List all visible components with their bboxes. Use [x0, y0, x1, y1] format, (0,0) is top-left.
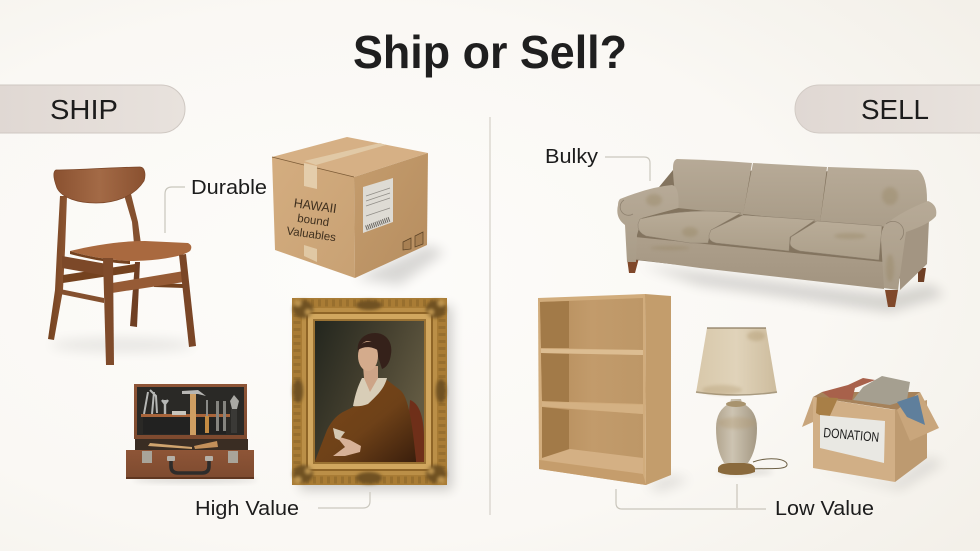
box side — [895, 400, 927, 482]
leader line: Bulky — [605, 157, 650, 181]
right flap — [897, 392, 939, 441]
right arm front — [881, 201, 936, 290]
header pill: SHIP: SHIP — [50, 94, 118, 125]
seat cushions — [638, 211, 741, 243]
front legs — [103, 258, 114, 365]
canvas — [315, 321, 424, 462]
neck — [363, 366, 378, 392]
label: High Value: High Value — [195, 498, 299, 520]
shade — [696, 328, 777, 396]
back cushions — [673, 159, 752, 215]
icon: toolbox — [126, 384, 257, 483]
icon: sofa — [617, 159, 945, 312]
compartments — [540, 298, 643, 350]
title: Ship or Sell? — [353, 26, 627, 78]
chemise — [353, 378, 387, 406]
icon: framed portrait — [292, 298, 452, 490]
box front — [813, 397, 895, 482]
seat — [70, 241, 191, 261]
face — [358, 341, 378, 371]
clothes — [822, 378, 875, 400]
right arm side — [900, 220, 929, 290]
body underlay — [636, 170, 927, 288]
frame ornaments — [293, 300, 446, 484]
latches — [142, 451, 152, 463]
tray — [135, 439, 248, 451]
base — [633, 237, 884, 289]
base — [126, 450, 254, 479]
brass foot — [718, 463, 755, 475]
rear legs and posts — [48, 196, 67, 340]
leader line: High Value — [318, 492, 370, 508]
leader line: Durable — [165, 187, 185, 233]
icon: donation box — [802, 376, 945, 490]
cord — [752, 459, 787, 469]
blue garment — [897, 395, 925, 425]
tape — [304, 143, 386, 165]
shelves — [541, 349, 643, 355]
lid — [134, 384, 247, 439]
box lettering: HAWAII — [293, 195, 338, 216]
header pill: SHIP — [0, 85, 185, 133]
box interior — [813, 392, 920, 410]
label: Bulky: Bulky — [545, 146, 598, 168]
tan garment — [816, 397, 838, 420]
frame — [292, 298, 447, 485]
icon: bookshelf — [538, 294, 690, 492]
backrest — [54, 167, 145, 203]
label: Durable: Durable — [191, 177, 267, 199]
hair — [358, 333, 391, 369]
tools — [141, 390, 239, 435]
back rail and stretchers — [63, 264, 135, 283]
header pill: SELL: SELL — [861, 94, 929, 125]
shaded inner wall — [540, 301, 569, 348]
icon: shipping box — [272, 137, 445, 285]
leader bracket: Low Value — [616, 484, 766, 509]
header pill: SELL — [795, 85, 980, 133]
label: Low Value: Low Value — [775, 498, 874, 520]
left arm — [617, 185, 678, 262]
apron — [62, 256, 107, 276]
box lettering: bound — [296, 213, 330, 229]
front frame — [538, 294, 646, 485]
central divider — [489, 117, 491, 515]
handle — [171, 459, 209, 473]
dress — [315, 380, 416, 462]
hands and cuffs — [333, 436, 361, 456]
box lettering — [286, 195, 341, 244]
stains — [646, 187, 898, 282]
shipping label — [363, 178, 393, 233]
box lettering: Valuables — [286, 225, 337, 244]
side — [645, 294, 671, 485]
front stretcher — [112, 271, 184, 293]
icon: table lamp — [696, 328, 787, 475]
legs — [627, 258, 639, 273]
base — [716, 399, 757, 463]
donation label — [820, 415, 885, 463]
icon: wooden chair — [48, 167, 196, 365]
left flap — [802, 397, 813, 427]
icon: donation box: DONATION — [823, 425, 880, 445]
chair back — [405, 400, 424, 462]
